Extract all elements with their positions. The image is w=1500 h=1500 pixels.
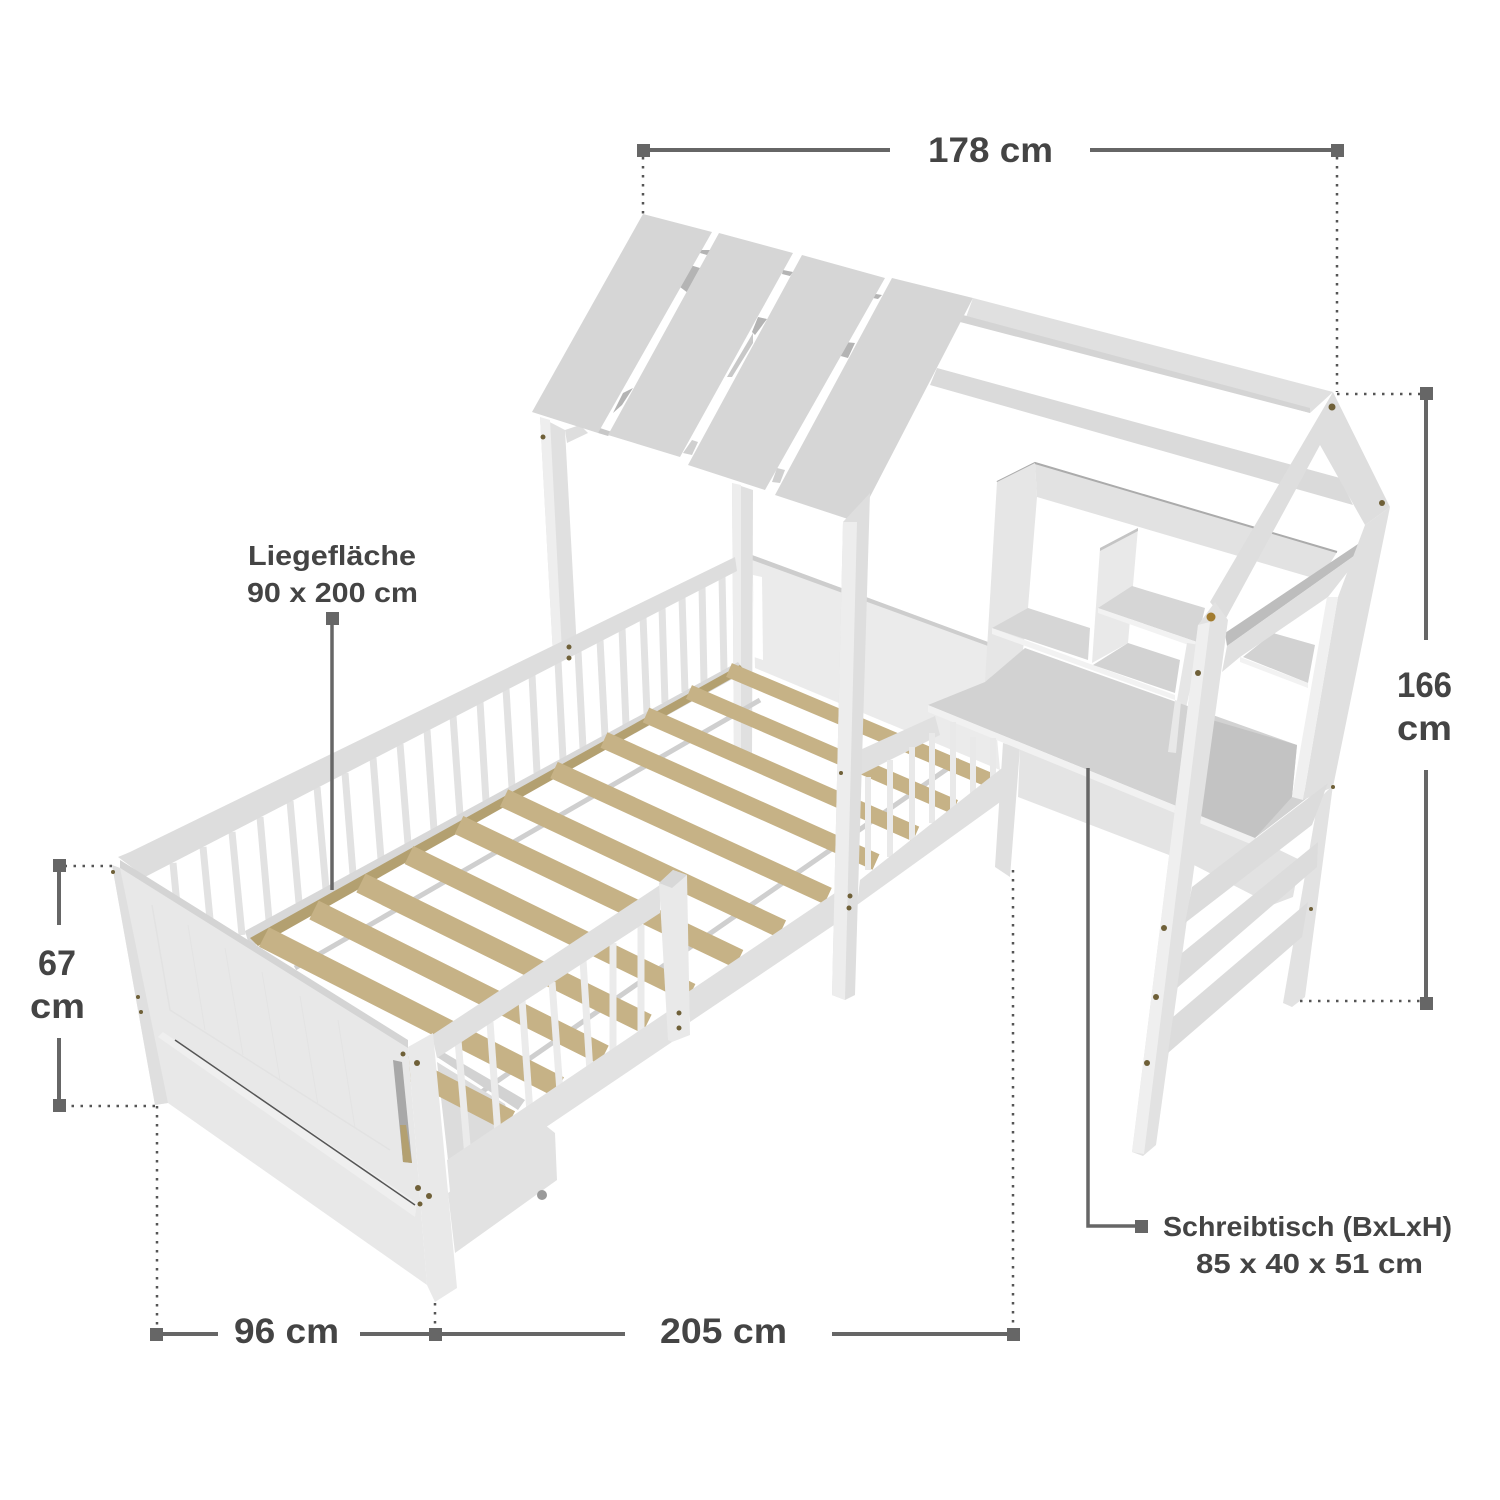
dimension: 178 cm width: 178 cm [928, 131, 1053, 170]
wooden ledge [250, 665, 745, 946]
shelf unit [985, 463, 1337, 753]
far end board with posts [540, 417, 1000, 770]
near guard spindles [458, 925, 641, 1157]
callout: Schreibtisch [1088, 768, 1452, 1279]
callout: Liegefläche: Liegefläche [248, 540, 416, 571]
inner frame and drawer seen behind the near guard [437, 1052, 525, 1160]
dimension: 96 cm width [150, 1312, 429, 1351]
roof beams seen through plank gaps [598, 250, 882, 483]
dimension: 67 cm height [30, 859, 85, 1112]
wooden slats [215, 670, 992, 1121]
near guard rails and end post [432, 870, 690, 1192]
dimension: 205 cm length [429, 1312, 1020, 1351]
callout: Schreibtisch: Schreibtisch (BxLxH) [1163, 1211, 1452, 1242]
roof planks [532, 214, 973, 522]
far side guard rail spindles [173, 576, 724, 967]
dimension: 96 cm width: 96 cm [234, 1312, 339, 1351]
bolts [111, 404, 1385, 1206]
dimension: 178 cm width [637, 131, 1344, 170]
far right guard [857, 716, 1003, 905]
roof side rails [930, 298, 1353, 505]
callout: Liegefläche: 90 x 200 cm [247, 577, 418, 608]
dimension: 166 cm height [1397, 387, 1452, 1010]
dotted extension lines [62, 157, 1422, 1330]
bed illustration [111, 214, 1390, 1302]
drawer box [448, 1125, 557, 1253]
dimension: 166 cm height: 166 [1397, 666, 1452, 705]
dimension: 205 cm length: 205 cm [660, 1312, 787, 1351]
end panel with drawer front [112, 860, 457, 1302]
ladder rungs [1168, 783, 1328, 1053]
cross beams [295, 700, 960, 1100]
desk [928, 648, 1328, 905]
dimension: 67 cm height: cm [30, 987, 85, 1026]
far side guard top rail [118, 557, 737, 877]
dimension: 166 cm height: cm [1397, 709, 1452, 748]
callout: Liegefläche [247, 540, 418, 890]
dimension: 67 cm height: 67 [38, 944, 76, 983]
front middle post [832, 493, 870, 1000]
callout: Schreibtisch: 85 x 40 x 51 cm [1196, 1248, 1423, 1279]
right gable frame [1132, 392, 1390, 1156]
far side lower rail [245, 662, 745, 948]
side rail under guard [688, 893, 837, 1022]
